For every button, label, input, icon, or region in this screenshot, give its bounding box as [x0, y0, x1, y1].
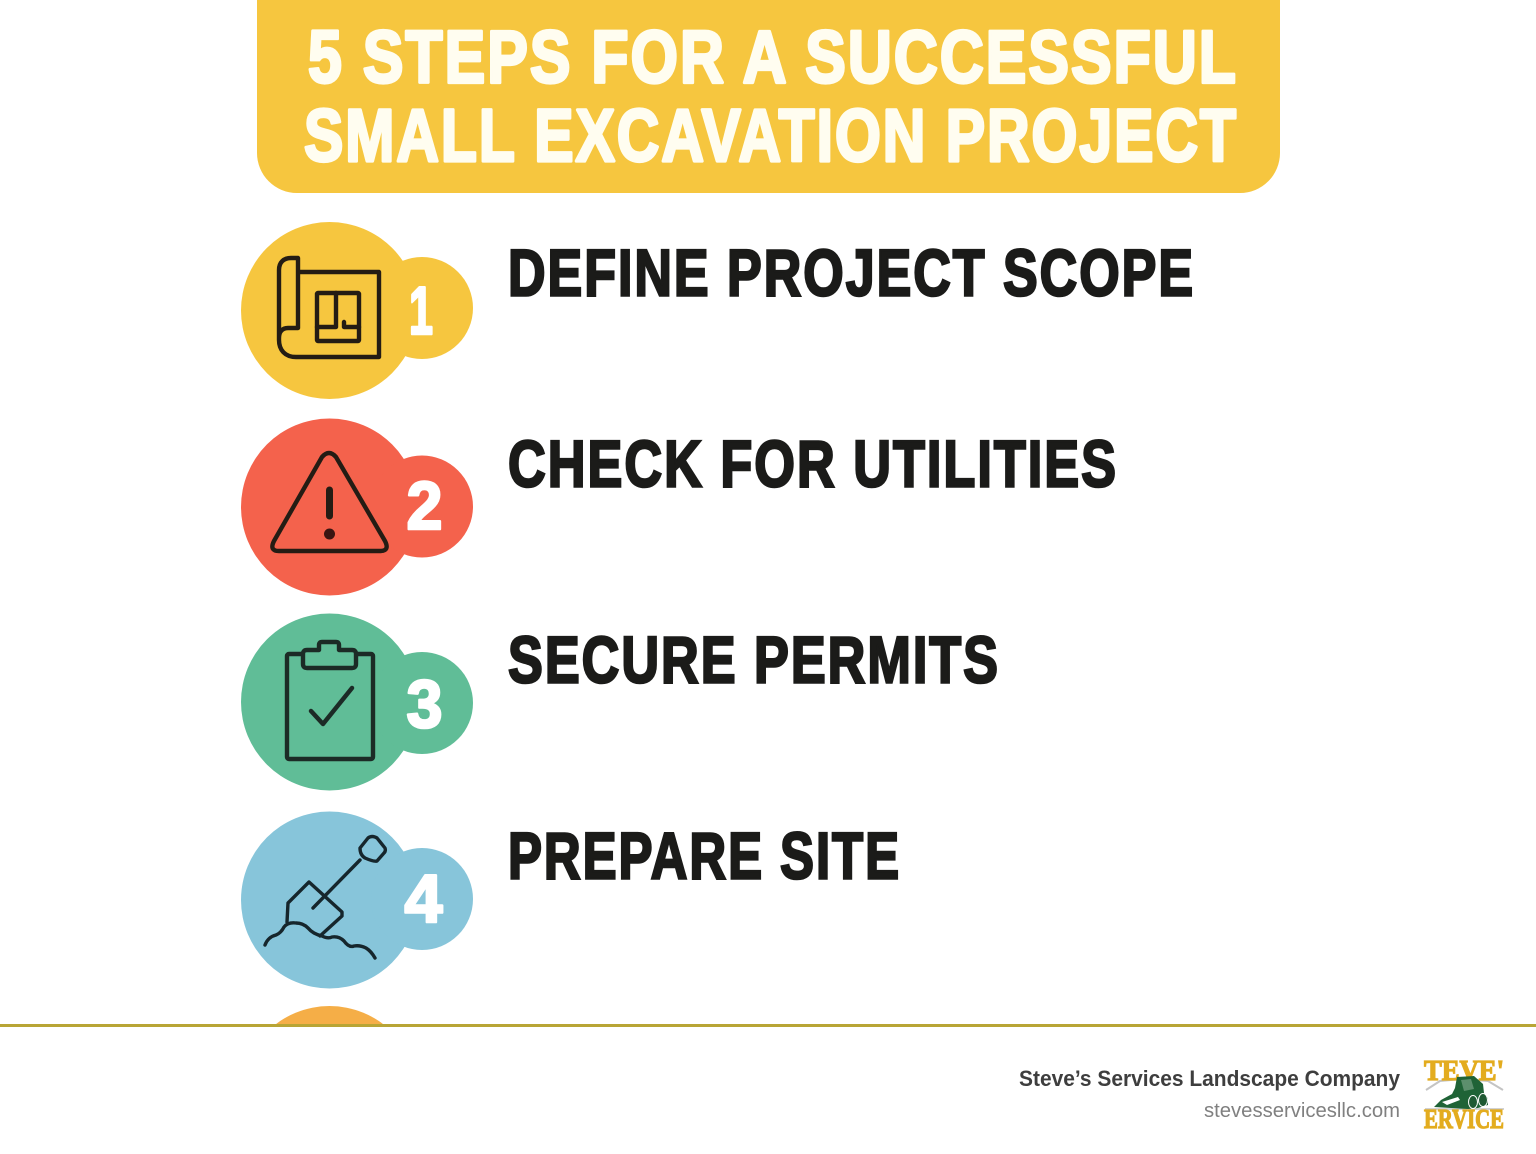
- step 3 label: SECURE PERMITS: [508, 622, 1000, 696]
- badge: step 3: [241, 614, 473, 790]
- badge: step 1: [241, 222, 473, 399]
- step 4: [241, 812, 901, 988]
- logo: TEVE': [1424, 1056, 1504, 1087]
- number 1: 1: [409, 273, 433, 349]
- icon: clipboard check: [287, 642, 373, 759]
- step 1 label: DEFINE PROJECT SCOPE: [508, 236, 1195, 310]
- logo: ERVICE: [1424, 1104, 1504, 1134]
- title line 2: SMALL EXCAVATION PROJECT: [304, 94, 1238, 177]
- step 2: [241, 418, 1118, 596]
- website: stevesservicesllc.com: [1204, 1100, 1400, 1122]
- step 5 badge, cropped by footer: [241, 1006, 418, 1154]
- number 3: 3: [406, 666, 442, 742]
- number 2: 2: [406, 468, 442, 544]
- title line 1: 5 STEPS FOR A SUCCESSFUL: [308, 16, 1238, 98]
- footer: [0, 1024, 1536, 1154]
- icon: blueprint: [279, 258, 379, 357]
- step 4 label: PREPARE SITE: [508, 818, 901, 892]
- company name: Steve’s Services Landscape Company: [1019, 1066, 1401, 1091]
- badge: step 2: [241, 418, 473, 596]
- badge: step 4: [241, 812, 473, 988]
- step 1: [241, 222, 1195, 399]
- step 2 label: CHECK FOR UTILITIES: [508, 426, 1118, 500]
- step 3: [241, 614, 1000, 790]
- logo: [1424, 1056, 1504, 1134]
- icon: shovel in soil: [265, 836, 385, 958]
- title banner: [257, 0, 1280, 193]
- icon: warning triangle: [272, 453, 387, 551]
- number 4: 4: [404, 861, 443, 937]
